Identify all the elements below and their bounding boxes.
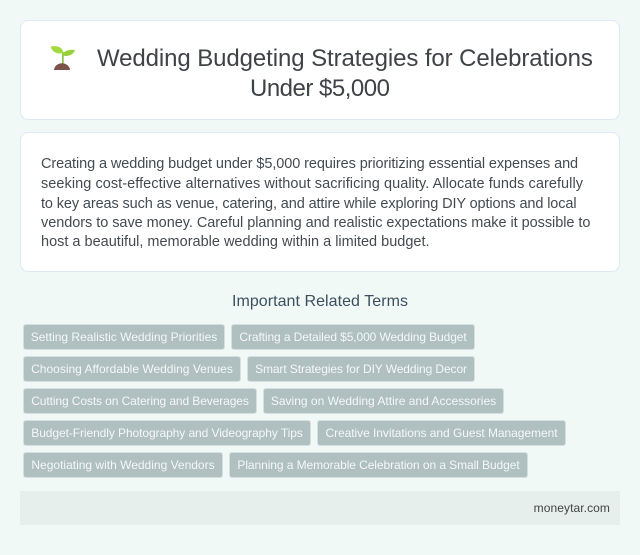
tag — [229, 452, 528, 478]
panel: description: host a beautiful, memorable wedding within a limited budget. — [41, 234, 430, 250]
tag list — [23, 324, 566, 478]
tag — [247, 356, 475, 382]
panel: description: Creating a wedding budget under $5,000 requires prioritizing essential expenses and — [41, 156, 578, 172]
tag: Budget-Friendly Photography and Videography Tips — [31, 426, 303, 440]
tag — [263, 388, 504, 414]
tag: Cutting Costs on Catering and Beverages — [31, 394, 249, 408]
heading: Important Related Terms: Important Related Terms — [232, 293, 408, 310]
tag: Smart Strategies for DIY Wedding Decor — [255, 362, 467, 376]
tag — [231, 324, 475, 350]
heading: title — [97, 45, 593, 102]
panel: title card — [20, 20, 620, 120]
tag: Creative Invitations and Guest Management — [325, 426, 558, 440]
tag — [23, 452, 223, 478]
tag — [23, 324, 225, 350]
tag — [23, 420, 311, 446]
panel: description: seeking cost-effective alternatives without sacrificing quality. Allocate funds carefully — [41, 176, 583, 192]
footer bar — [20, 491, 620, 525]
tag: Setting Realistic Wedding Priorities — [31, 330, 217, 344]
panel: description — [20, 132, 620, 272]
tag: Saving on Wedding Attire and Accessories — [271, 394, 496, 408]
panel: description: vendors to save money. Careful planning and realistic expectations make it possible to — [41, 214, 590, 230]
heading: title: Under $5,000 — [250, 75, 389, 102]
tag: Crafting a Detailed $5,000 Wedding Budget — [239, 330, 467, 344]
tag: Planning a Memorable Celebration on a Small Budget — [237, 458, 520, 472]
footer source text: moneytar.com — [534, 501, 610, 515]
heading: title: Wedding Budgeting Strategies for Celebrations — [97, 45, 593, 72]
tag — [317, 420, 566, 446]
tag: Choosing Affordable Wedding Venues — [31, 362, 233, 376]
panel: description: to key areas such as venue, catering, and attire while exploring DIY options and local — [41, 196, 576, 212]
tag — [23, 356, 241, 382]
tag — [23, 388, 257, 414]
tag: Negotiating with Wedding Vendors — [31, 458, 215, 472]
icon: seedling — [50, 46, 75, 70]
